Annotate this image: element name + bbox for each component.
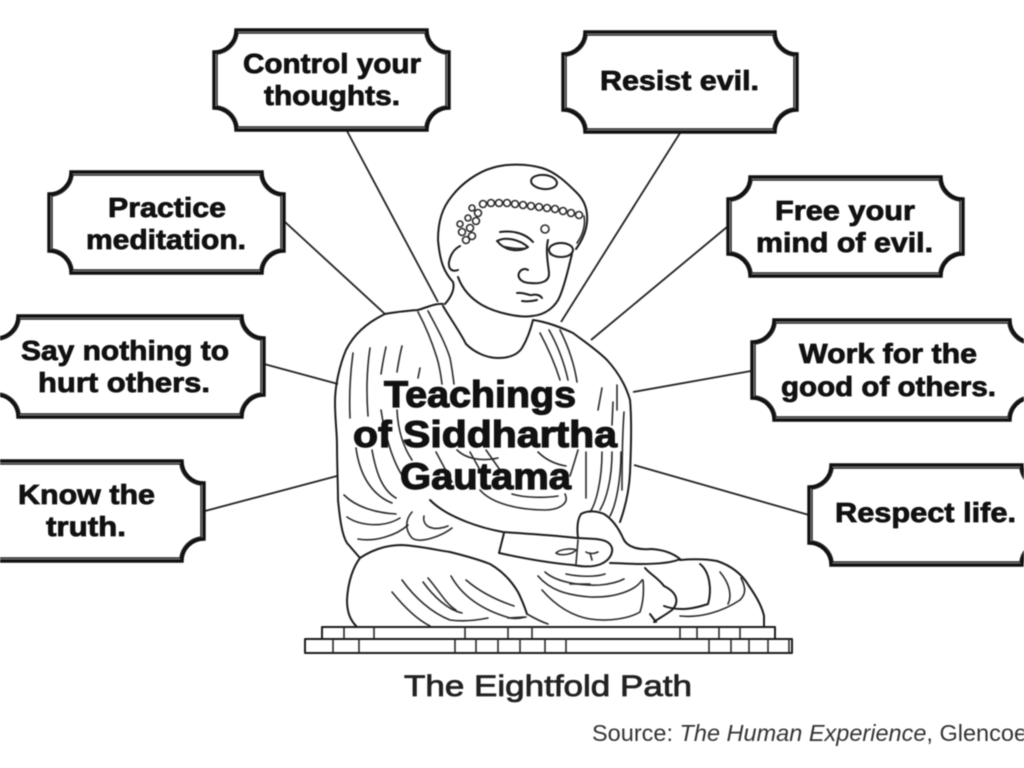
plaque: Control your thoughts: thoughts. [264,80,400,111]
plaque: Know the truth: truth. [46,511,126,542]
plaque: Know the truth: Know the [18,479,155,510]
plaque: Free your mind of evil: Free your [775,195,915,226]
illustration: seated Buddha statue [305,165,792,653]
plaque: Resist evil: Resist evil. [600,65,759,96]
plaque: Practice meditation: Practice [108,192,226,223]
plaque: Respect life [809,465,1024,565]
face features [497,174,573,301]
robe and torso [335,304,680,566]
plaque: Say nothing to hurt others: Say nothing to [21,335,229,366]
plaque: Control your thoughts: Control your [243,48,421,79]
plaque: Free your mind of evil [728,177,963,276]
head and hair [438,165,587,316]
plaque: Say nothing to hurt others: hurt others. [38,367,210,398]
plaque: Resist evil [563,32,797,132]
plaque: Work for the good of others [752,320,1024,420]
plaque: Free your mind of evil: mind of evil. [756,227,933,258]
plaque: Say nothing to hurt others [0,316,264,417]
heading: Teachings of Siddhartha Gautama: Teachings [384,374,576,415]
plaque: Practice meditation [49,172,284,273]
plaque: Respect life: Respect life. [835,497,1016,528]
crossed legs [347,545,764,627]
source credit: Source: The Human Experience, Glencoe [592,720,1024,746]
plaque: Work for the good of others: Work for the [799,338,977,369]
heading: Teachings of Siddhartha Gautama: Gautama [400,456,571,497]
caption: The Eightfold Path: The Eightfold Path [404,670,692,703]
connector lines [205,131,809,515]
heading: Teachings of Siddhartha Gautama: of Siddhartha [353,414,617,455]
stone base [305,627,792,653]
plaque: Know the truth [0,461,204,561]
plaque: Practice meditation: meditation. [86,224,246,255]
heading: Teachings of Siddhartha Gautama [353,374,617,497]
plaque: Work for the good of others: good of others. [781,371,996,402]
bead hairline [457,200,585,244]
plaque: Control your thoughts [214,30,449,130]
